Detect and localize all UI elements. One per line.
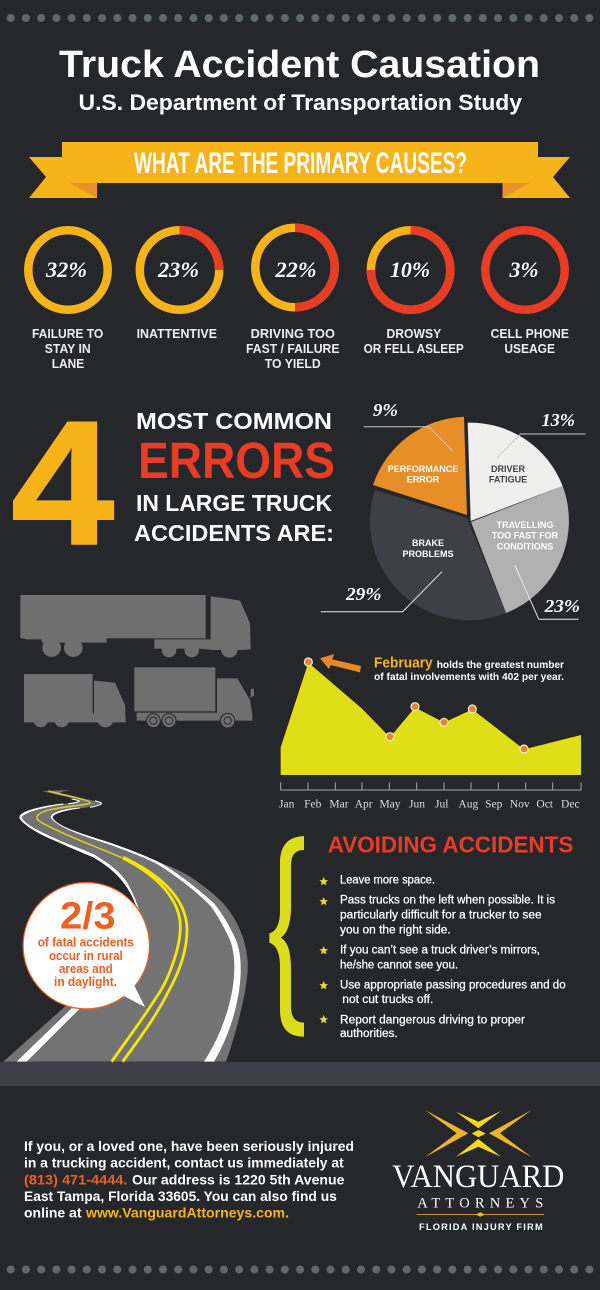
month labels: Jun	[409, 798, 425, 810]
month labels: Aug	[458, 798, 478, 810]
heading: 4 most common errors: 4	[11, 385, 114, 582]
bullet text	[340, 874, 566, 1040]
month labels: Oct	[536, 798, 554, 810]
road: centre lines	[37, 791, 123, 858]
road: left edge line	[19, 803, 139, 910]
callout bubble: 2/3 of fatal accidents: areas and	[59, 962, 113, 976]
month labels: May	[379, 798, 401, 810]
ring: 3% cell phone	[485, 230, 569, 356]
bullet stars	[319, 877, 328, 1023]
slice: performance error	[373, 417, 467, 515]
bullet text: If you can’t see a truck driver’s mirrors,	[340, 944, 540, 956]
pie chart: errors: DRIVER	[491, 464, 525, 474]
ring: 22% driving too fast: 22%	[274, 257, 316, 282]
bullet text: Report dangerous driving to proper	[340, 1014, 525, 1026]
ring: 10% drowsy: OR FELL ASLEEP	[364, 342, 464, 356]
ring: 10% drowsy: 10%	[390, 257, 430, 282]
month labels: Nov	[510, 798, 530, 810]
ring: 10% drowsy	[364, 230, 464, 356]
heading: 4 most common errors: MOST COMMON	[136, 408, 332, 434]
footer contact text: (813) 471-4444.	[24, 1172, 127, 1187]
pie chart: errors: CONDITIONS	[497, 542, 553, 552]
ring: 10% drowsy: DROWSY	[386, 327, 442, 341]
icon: delivery truck	[134, 667, 254, 728]
callout: february: of fatal involvements with 402 per year.	[374, 671, 564, 683]
month labels: Apr	[355, 798, 373, 810]
footer contact text: If you, or a loved one, have been seriously injured	[24, 1139, 354, 1154]
ring: 32% failure to stay in lane: 32%	[45, 257, 87, 282]
bullet text: Pass trucks on the left when possible. It is	[340, 894, 555, 906]
logo: vanguard attorneys: FLORIDA INJURY FIRM	[419, 1222, 543, 1232]
bullet text: authorities.	[340, 1028, 398, 1040]
ring: 32% failure to stay in lane	[28, 230, 108, 371]
pie chart: errors: TOO FAST FOR	[492, 530, 559, 540]
logo: vanguard attorneys	[392, 1110, 564, 1232]
ring: 3% cell phone: USEAGE	[504, 342, 555, 356]
callout bubble: 2/3 of fatal accidents: in daylight.	[54, 975, 117, 989]
arrow	[320, 654, 361, 672]
callout: february: holds the greatest number	[437, 659, 564, 671]
brace	[269, 836, 304, 1037]
illustration: winding road	[3, 790, 248, 1062]
month labels: Feb	[304, 798, 322, 810]
pie chart: errors: 9%	[373, 400, 398, 420]
footer contact text: Our address is 1220 5th Avenue	[132, 1172, 345, 1187]
bullet text: Use appropriate passing procedures and do	[340, 980, 566, 992]
title: Truck Accident Causation	[59, 44, 540, 86]
footer contact text: East Tampa, Florida 33605. You can also find us	[24, 1189, 337, 1204]
ring: 32% failure to stay in lane: LANE	[52, 357, 84, 371]
month labels: Jul	[435, 798, 448, 810]
month labels: Jan	[279, 798, 295, 810]
bullet text: he/she cannot see you.	[340, 960, 458, 972]
logo mark	[425, 1110, 532, 1157]
month labels: Dec	[561, 798, 580, 810]
pie chart: errors: 23%	[544, 596, 580, 616]
logo: vanguard attorneys: ATTORNEYS	[417, 1195, 543, 1211]
icons: truck silhouettes	[20, 595, 254, 728]
chart: fatal involvements by month	[279, 654, 581, 810]
heading: 4 most common errors	[11, 385, 335, 582]
icon: box truck	[24, 674, 126, 727]
heading: 4 most common errors: ACCIDENTS ARE:	[134, 520, 334, 546]
pie chart: errors: PROBLEMS	[402, 549, 454, 559]
callout bubble: 2/3 of fatal accidents: of fatal accidents	[38, 936, 134, 950]
callout bubble: 2/3 of fatal accidents: 2/3	[60, 896, 116, 938]
callout: february	[374, 654, 564, 683]
pie chart: errors: ERROR	[407, 474, 440, 484]
callout bubble: 2/3 of fatal accidents	[23, 882, 149, 1009]
ring: 22% driving too fast: DRIVING TOO	[251, 327, 335, 341]
ring: 23% inattentive: INATTENTIVE	[137, 327, 217, 341]
ring: 23% inattentive: 23%	[157, 257, 199, 282]
ring: 22% driving too fast: TO YIELD	[265, 357, 321, 371]
pie chart: errors: PERFORMANCE	[388, 464, 458, 474]
callout bubble: 2/3 of fatal accidents: occur in rural	[49, 949, 123, 963]
bullet text: particularly difficult for a trucker to see	[340, 910, 542, 922]
pie chart: errors	[321, 400, 586, 620]
pie chart: errors: 13%	[542, 410, 575, 430]
subtitle: U.S. Department of Transportation Study	[78, 90, 522, 115]
bullet text: not cut trucks off.	[342, 994, 433, 1006]
area series	[281, 654, 581, 790]
band	[0, 1062, 600, 1086]
callout: february: February	[374, 654, 433, 672]
footer contact text: in a trucking accident, contact us immediately at	[24, 1156, 344, 1171]
slice: travelling too fast	[471, 486, 569, 613]
pie chart: errors: 29%	[345, 584, 382, 604]
data points	[304, 658, 528, 753]
logo: vanguard attorneys: VANGUARD	[392, 1159, 564, 1195]
footer contact text: www.VanguardAttorneys.com.	[85, 1206, 289, 1221]
footer contact text	[24, 1139, 354, 1221]
month labels: Mar	[329, 798, 349, 810]
heading: AVOIDING ACCIDENTS	[328, 832, 573, 858]
ring: 23% inattentive	[137, 230, 219, 341]
bullet text: Leave more space.	[340, 874, 435, 886]
ring: 22% driving too fast	[246, 228, 340, 371]
slice: brake problems	[370, 490, 506, 620]
bullet text: you on the right side.	[340, 924, 451, 936]
road: right edge line	[51, 808, 241, 1062]
pie chart: errors: TRAVELLING	[497, 520, 553, 530]
ring: 32% failure to stay in lane: STAY IN	[45, 342, 91, 356]
heading: 4 most common errors: IN LARGE TRUCK	[136, 490, 332, 516]
ring: 32% failure to stay in lane: FAILURE TO	[32, 327, 104, 341]
icon: semi truck	[20, 595, 251, 658]
ring: 22% driving too fast: FAST / FAILURE	[246, 342, 340, 356]
pie chart: errors: BRAKE	[412, 538, 444, 548]
pie chart: errors: FATIGUE	[489, 474, 527, 484]
ring: 3% cell phone: 3%	[509, 257, 538, 282]
panel: primary cause rings	[28, 228, 569, 371]
month labels	[279, 798, 580, 810]
panel: avoiding accidents	[319, 832, 573, 1040]
axis	[281, 782, 581, 790]
slice: driver fatigue	[468, 423, 563, 521]
month labels: Sep	[485, 798, 503, 810]
ring: 3% cell phone: CELL PHONE	[491, 327, 569, 341]
banner: what are the primary causes	[29, 142, 570, 198]
footer contact text: online at	[24, 1206, 82, 1221]
heading: 4 most common errors: ERRORS	[138, 432, 335, 489]
